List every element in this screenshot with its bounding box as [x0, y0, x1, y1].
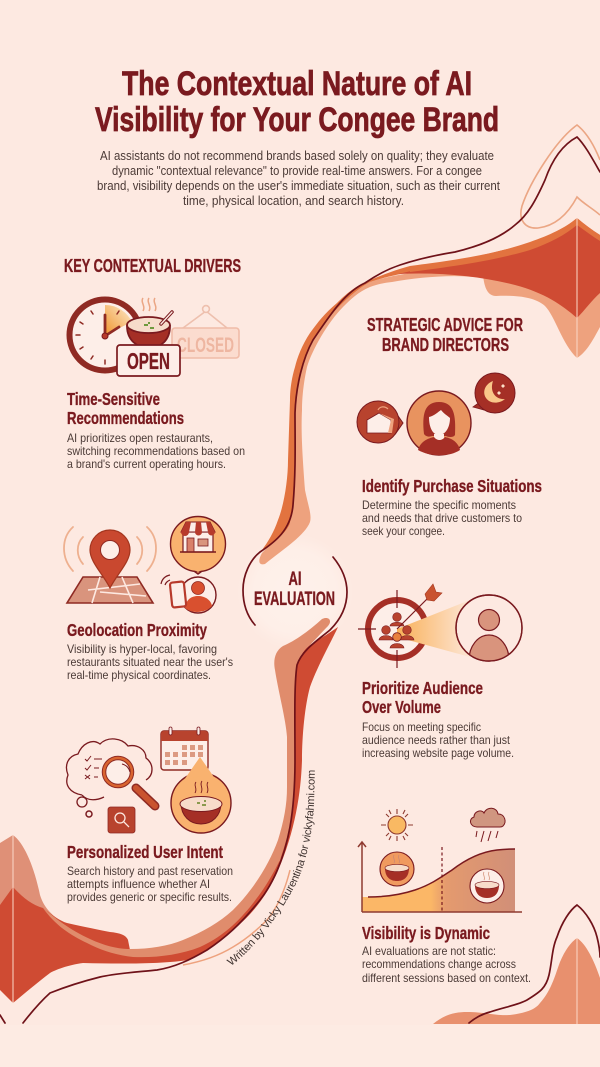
subheading: Prioritize Audience	[362, 678, 483, 698]
icon: single audience member	[455, 594, 523, 662]
panel: geolocation proximity	[64, 516, 233, 682]
icon: calendar	[161, 727, 208, 770]
chart: visibility curve	[358, 842, 522, 912]
body text	[362, 944, 531, 985]
icon: open sign: OPEN	[127, 348, 170, 374]
author credit: Written by Vicky Laurentina for vickyfahmi.com	[226, 770, 315, 965]
title: The Contextual Nature of AI	[122, 65, 472, 103]
icon: user with phone	[161, 575, 216, 613]
body text: increasing website page volume.	[362, 746, 514, 760]
body text	[362, 720, 514, 760]
heading: strategic advice: BRAND DIRECTORS	[382, 335, 509, 355]
body text: Determine the specific moments	[362, 498, 516, 512]
icon: open sign	[117, 345, 180, 376]
title	[95, 65, 499, 139]
flowing ribbon: bottom right	[433, 938, 600, 1024]
icon: closed sign	[172, 306, 239, 358]
heading: strategic advice	[367, 315, 523, 355]
panel: prioritize audience over volume	[358, 584, 522, 760]
body text: seek your congee.	[362, 524, 445, 538]
body text: Visibility is hyper-local, favoring	[67, 642, 217, 656]
flowing ribbon: lower left body	[0, 618, 338, 1003]
body text: Focus on meeting specific	[362, 720, 481, 734]
subheading: Identify Purchase Situations	[362, 476, 542, 496]
body text: restaurants situated near the user's	[67, 655, 233, 669]
panel: time-sensitive recommendations	[67, 298, 245, 471]
icon: bowl in orange bubble	[171, 757, 231, 833]
icon: congee bowl	[127, 298, 172, 348]
subheading: Time-Sensitive	[67, 389, 160, 409]
intro text: dynamic "contextual relevance" to provide real-time answers. For a congee	[112, 163, 482, 178]
flowing ribbon: upper curve into AI circle	[259, 266, 483, 564]
icon: rain cloud	[470, 808, 505, 842]
body text	[67, 864, 233, 904]
icon: cool bowl	[470, 869, 504, 903]
body text: AI prioritizes open restaurants,	[67, 431, 213, 445]
icon: search square	[108, 807, 135, 833]
icon: warm bowl	[380, 852, 414, 886]
body text: AI evaluations are not static:	[362, 944, 496, 958]
icon: woman avatar	[407, 391, 471, 455]
icon: sun	[381, 809, 413, 841]
subheading: Recommendations	[67, 408, 184, 428]
bottom strip	[0, 1025, 600, 1067]
subheading	[362, 678, 483, 717]
icon: magnifying glass	[104, 758, 155, 806]
title: Visibility for Your Congee Brand	[95, 101, 499, 139]
subheading: Over Volume	[362, 697, 441, 717]
subheading	[67, 389, 184, 428]
subheading: Personalized User Intent	[67, 842, 223, 862]
body text	[67, 431, 245, 471]
heading: key contextual drivers: KEY CONTEXTUAL DRIVERS	[64, 256, 241, 276]
icon: store speech bubble	[170, 516, 226, 574]
flowing ribbon: top right	[398, 125, 600, 358]
body text: Search history and past reservation	[67, 864, 233, 878]
icon: map with location pin	[64, 527, 156, 603]
intro text: brand, visibility depends on the user's immediate situation, such as their current	[97, 178, 500, 193]
icon: night bubble	[473, 373, 515, 413]
panel: visibility is dynamic	[358, 808, 531, 985]
panel: identify purchase situations	[357, 373, 542, 538]
AI evaluation label	[254, 569, 335, 610]
icon: target with audience	[358, 584, 470, 668]
intro text	[97, 148, 500, 208]
heading: strategic advice: STRATEGIC ADVICE FOR	[367, 315, 523, 335]
body text: audience needs rather than just	[362, 733, 511, 747]
body text	[362, 498, 522, 538]
intro text: AI assistants do not recommend brands based solely on quality; they evaluate	[100, 148, 494, 163]
body text: provides generic or specific results.	[67, 890, 232, 904]
icon: clock	[70, 300, 140, 370]
body text: switching recommendations based on	[67, 444, 245, 458]
subheading: Geolocation Proximity	[67, 620, 207, 640]
icon: thought cloud	[66, 739, 152, 817]
AI evaluation label: AI	[288, 569, 302, 590]
body text: attempts influence whether AI	[67, 877, 210, 891]
glow behind AI evaluation	[237, 534, 353, 650]
body text: and needs that drive customers to	[362, 511, 522, 525]
icon: takeaway box bubble	[357, 401, 403, 443]
body text: different sessions based on context.	[362, 971, 531, 985]
body text	[67, 642, 233, 682]
body text: real-time physical coordinates.	[67, 668, 211, 682]
AI evaluation label: EVALUATION	[254, 589, 335, 610]
body text: recommendations change across	[362, 957, 516, 971]
subheading: Visibility is Dynamic	[362, 923, 490, 943]
panel: personalized user intent	[66, 727, 233, 904]
body text: a brand's current operating hours.	[67, 457, 226, 471]
intro text: time, physical location, and search history.	[183, 193, 404, 208]
icon: closed sign: CLOSED	[177, 334, 234, 357]
